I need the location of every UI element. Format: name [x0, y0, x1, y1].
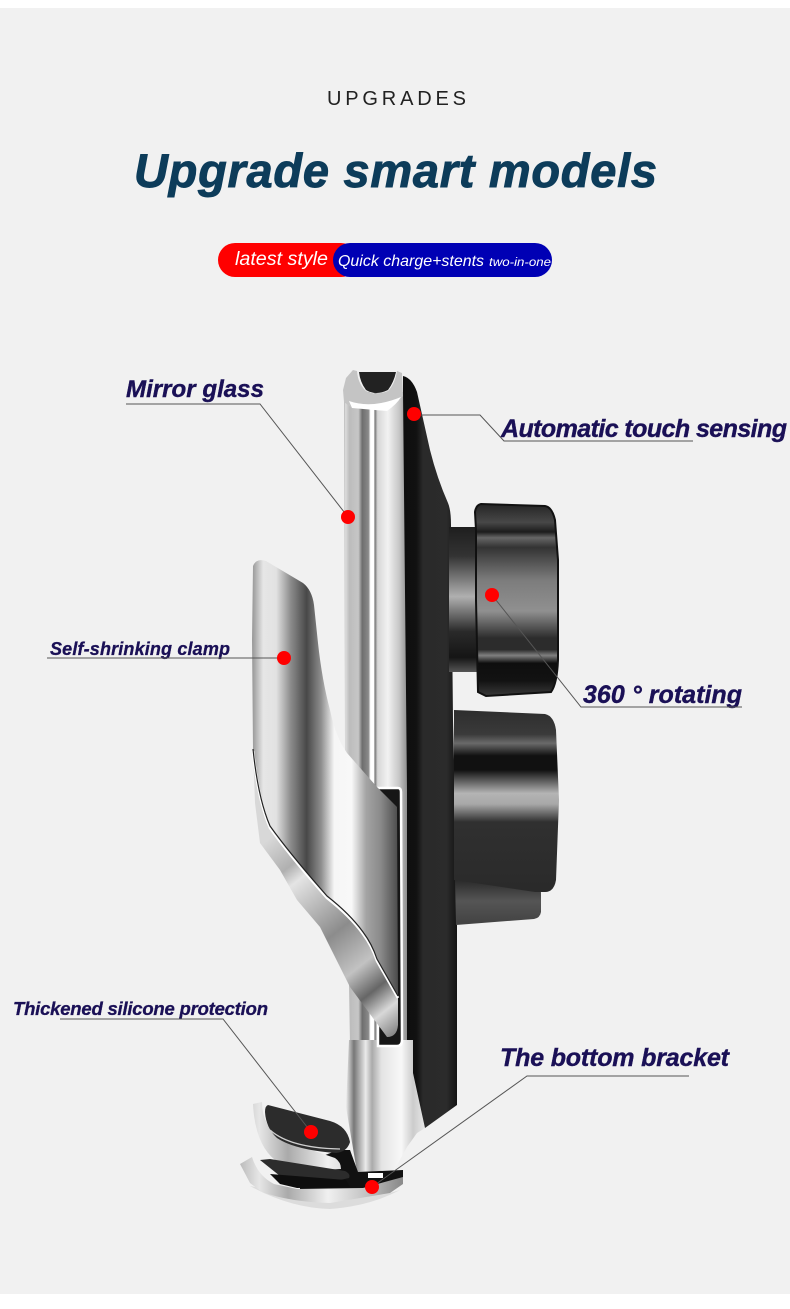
callout: 360 rotating: [485, 588, 742, 709]
callout: self-shrinking clamp: Self-shrinking clamp: [50, 639, 230, 659]
callout: the bottom bracket: [365, 1044, 731, 1194]
lower hook: [240, 1157, 403, 1203]
badge pill: [218, 243, 552, 277]
callout: thickened silicone protection: [13, 998, 318, 1139]
upper silicone pad: [265, 1105, 350, 1153]
lower silicone pad: [260, 1159, 350, 1180]
clamp edge highlight: [253, 749, 398, 998]
upper hook silver: [253, 1102, 341, 1170]
lower hook silver: [240, 1157, 403, 1203]
rotating knob: [475, 504, 558, 696]
red badge segment: [218, 243, 358, 277]
callout: self-shrinking clamp: [47, 639, 291, 665]
title: Upgrade smart models: [134, 144, 657, 197]
slot frame: [378, 788, 402, 1046]
product illustration: phone holder: [240, 370, 559, 1209]
motor body: [454, 710, 559, 892]
black base: [300, 1150, 403, 1190]
callout: mirror glass: Mirror glass: [126, 376, 264, 403]
blue badge segment: [333, 243, 552, 277]
rear collar: [449, 527, 479, 672]
black textured back plate: [403, 376, 457, 1130]
blue badge segment: Quick charge+stents: [338, 253, 484, 270]
callout: mirror glass: [126, 376, 355, 524]
red badge segment: latest style: [235, 249, 328, 270]
callout: automatic touch sensing: [407, 407, 787, 443]
mirror glass column: [344, 392, 407, 1045]
blue badge segment: two-in-one: [489, 255, 551, 269]
upper silicone hook: [253, 1102, 350, 1170]
lower hook shadow: [250, 1186, 400, 1209]
motor tab: [455, 878, 541, 925]
callout: 360 rotating: 360 ° rotating: [583, 681, 742, 709]
lower motor cylinder: [454, 710, 559, 925]
white clip: [368, 1173, 383, 1178]
column foot: [346, 1040, 425, 1172]
top cap of column: [343, 370, 403, 411]
self-shrinking clamp flange: [253, 750, 398, 1037]
self-shrinking clamp blade: [252, 560, 398, 997]
callout: thickened silicone protection: Thickened silicone protection: [13, 998, 268, 1019]
eyebrow heading: UPGRADES: [327, 88, 466, 110]
callout: automatic touch sensing: Automatic touch sensing: [500, 415, 787, 443]
callout: the bottom bracket: The bottom bracket: [500, 1044, 731, 1072]
